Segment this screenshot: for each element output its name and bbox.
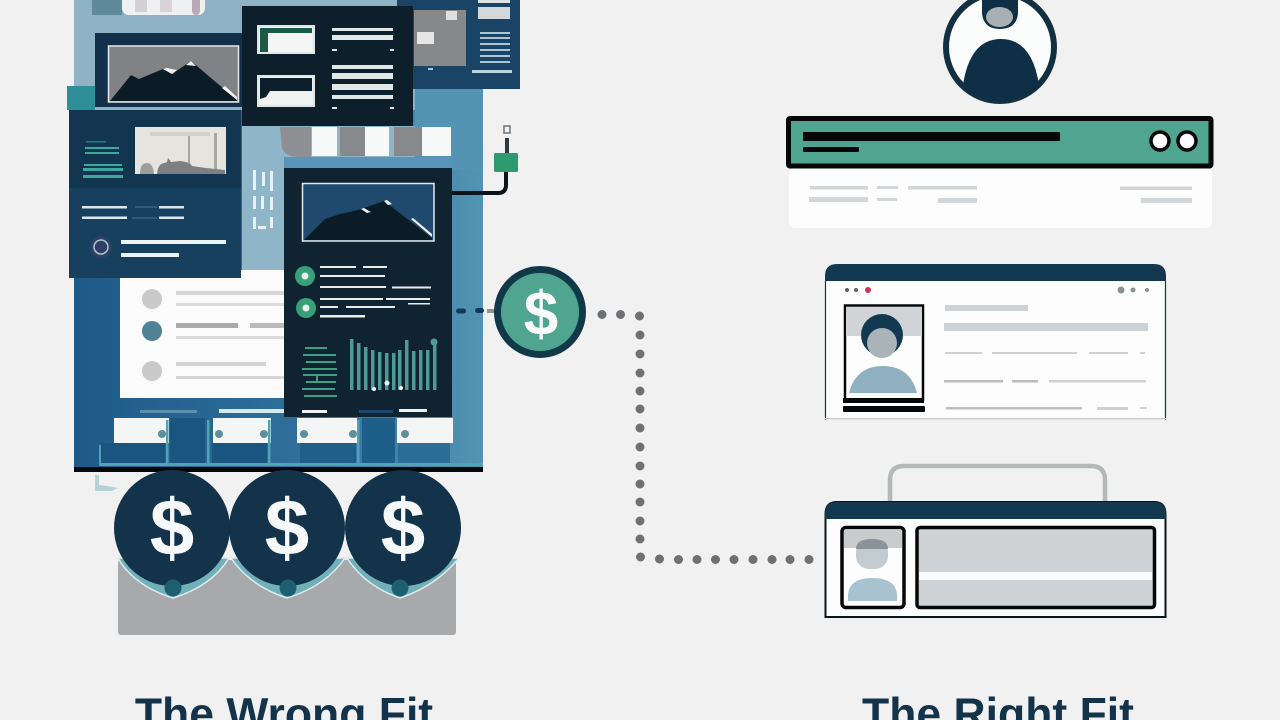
profile photo — [843, 306, 925, 412]
icon: user avatar — [946, 0, 1054, 104]
text lines — [320, 266, 431, 318]
small teal mark — [95, 475, 118, 491]
dollar coin 2: $ — [265, 483, 309, 572]
window dots — [845, 286, 1149, 294]
text lines — [944, 305, 1148, 410]
strip of thumbnails — [280, 127, 452, 168]
dollar coin 2 — [229, 470, 345, 586]
top partial card — [92, 0, 205, 15]
icon: teal tab — [67, 86, 95, 110]
panel: mountain image card — [95, 33, 245, 107]
panel: wrong fit software stack — [67, 0, 520, 491]
dollar coin 1: $ — [150, 483, 194, 572]
dotted connector from wrong fit to right fit — [456, 308, 814, 564]
green list chart — [302, 347, 337, 397]
panel: dark layout card — [242, 6, 413, 126]
small portrait frame — [842, 528, 904, 608]
large content frame — [917, 528, 1154, 608]
dollar coin 1 — [114, 470, 230, 586]
panel: top right dashboard — [397, 0, 520, 89]
panel: navy profile card — [69, 110, 241, 278]
gray base — [118, 560, 456, 635]
panel: white list card — [120, 270, 290, 398]
panel: green header card — [788, 118, 1212, 228]
bar chart — [350, 338, 438, 391]
panel: stacked dollar costs — [114, 470, 461, 635]
dollar coin 3: $ — [381, 483, 425, 572]
panel: black analytics card — [284, 168, 452, 417]
panel: compact profile card with handle — [825, 466, 1166, 617]
card handle — [890, 466, 1105, 502]
teal coin shadows — [118, 558, 459, 598]
coin knobs — [164, 580, 408, 596]
panel: profile listing card — [825, 264, 1166, 420]
footer ticks — [302, 409, 427, 413]
icon: green dollar coin: $ — [524, 280, 558, 349]
icon: green dollar coin — [498, 270, 582, 354]
row of white drawers — [99, 409, 483, 466]
icon: plug connector — [452, 126, 518, 193]
icons: green bullets — [295, 266, 316, 318]
small white tick marks — [253, 170, 273, 229]
dollar coin 3 — [345, 470, 461, 586]
base bar — [74, 467, 483, 472]
